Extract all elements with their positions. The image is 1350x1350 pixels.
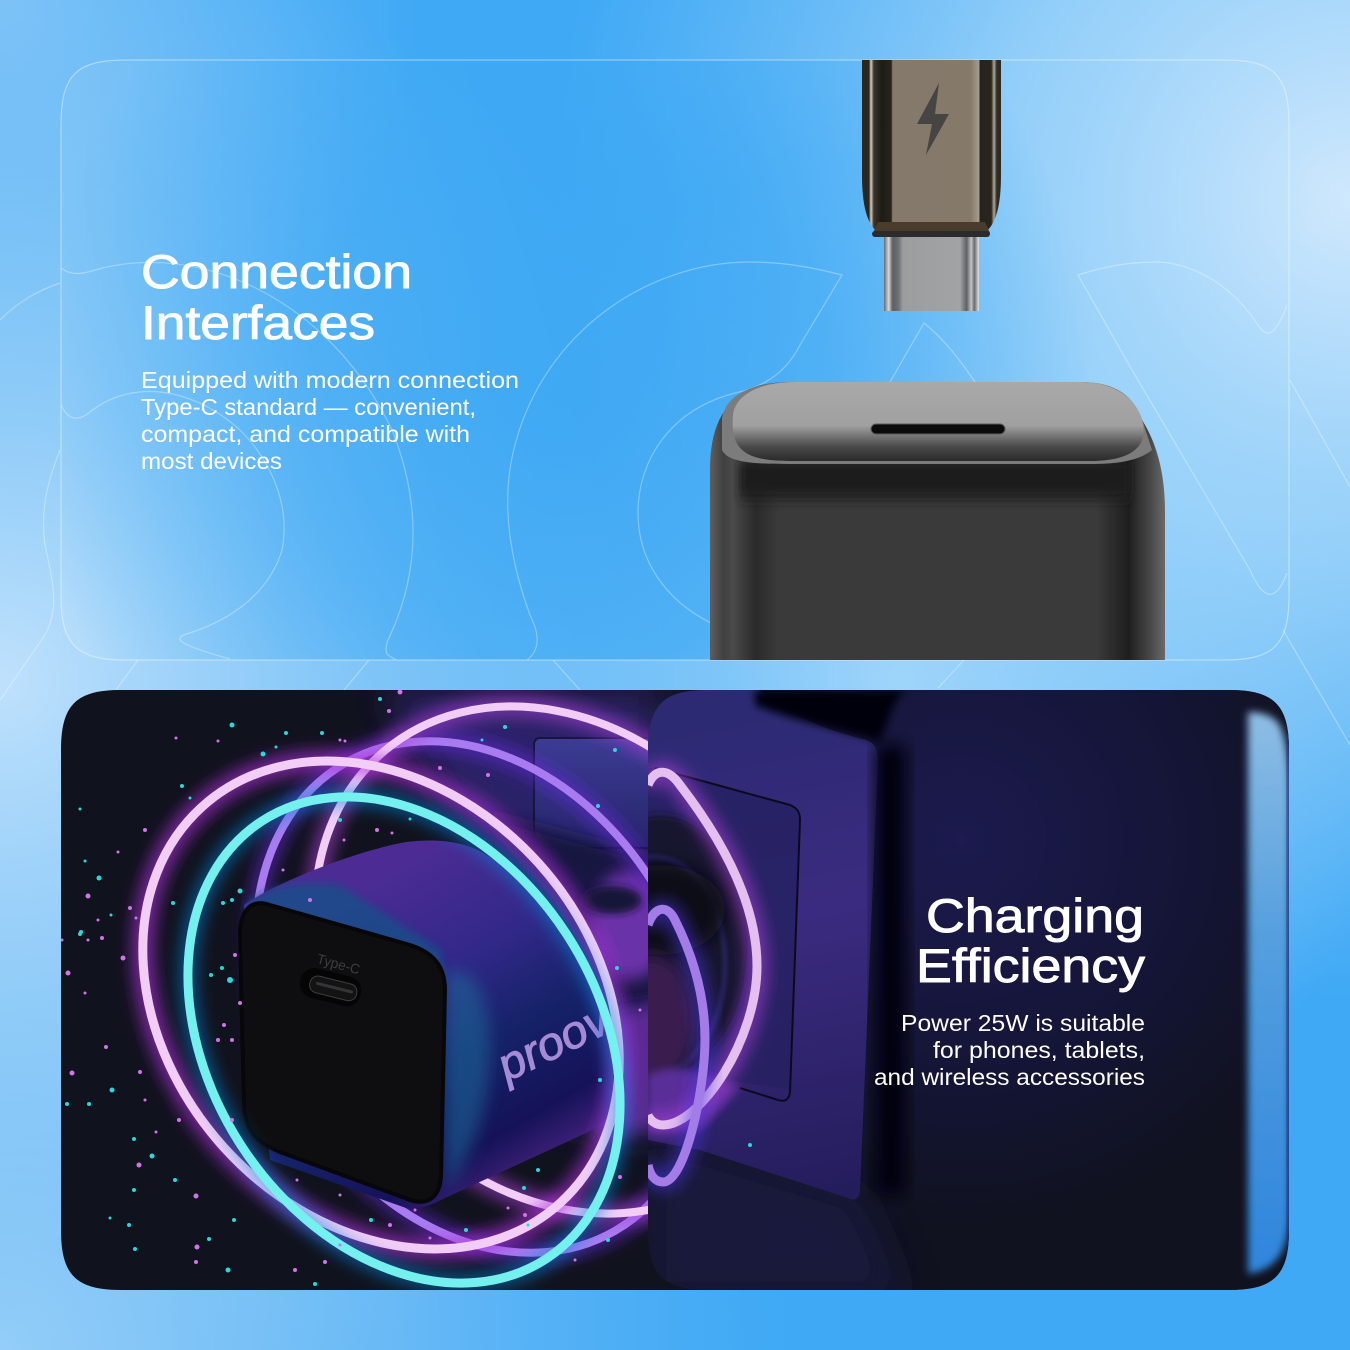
USB-C metal plug (884, 237, 979, 311)
charging description text: Power 25W is suitable (901, 1010, 1145, 1036)
charger front face (240, 903, 445, 1202)
socket plate outline (648, 768, 799, 1090)
heading: Connection Interfaces: Connection (141, 245, 412, 298)
charging description text: for phones, tablets, (933, 1037, 1145, 1063)
description text: Equipped with modern connection (141, 367, 519, 393)
glass panel surface (61, 60, 1289, 660)
purple back ring (235, 724, 648, 1272)
outer background logo outlines (0, 283, 1350, 745)
refracted pink ring (648, 772, 757, 1125)
pink back ring (296, 690, 650, 1232)
description text: compact, and compatible with (141, 421, 470, 447)
description text: Type-C standard — convenient, (141, 394, 476, 420)
blurred wall and socket (648, 690, 915, 1290)
heading: Charging Efficiency: Charging (926, 889, 1144, 942)
Type-C port (300, 968, 361, 1006)
Type-C label: Type-C (315, 950, 362, 977)
cyan sparkle particles (65, 697, 619, 1286)
pink front ring (120, 738, 638, 1270)
panel: charging efficiency glass (648, 690, 1289, 1290)
charging description text (874, 1010, 1145, 1090)
cyan front ring (168, 777, 637, 1290)
charging description text: and wireless accessories (874, 1064, 1145, 1090)
heading: Connection Interfaces (141, 245, 412, 349)
description text: most devices (141, 448, 282, 474)
heading: Charging Efficiency: Efficiency (916, 939, 1146, 992)
refracted logo outlines inside panel (61, 262, 1287, 660)
charger body (240, 840, 620, 1208)
charger USB-C port (871, 424, 1005, 434)
heading: Charging Efficiency (916, 889, 1146, 992)
proov logo: proov (487, 991, 620, 1092)
panel: charger with glowing rings (61, 690, 1289, 1290)
socket recess (648, 811, 751, 1070)
shadow right of wall plate (876, 745, 906, 1195)
blurred blue right edge (1248, 712, 1290, 1274)
pink sparkle particles (60, 690, 642, 1272)
glass haze (61, 60, 1289, 660)
icon: lightning bolt (917, 83, 949, 155)
black charger, top view (710, 382, 1165, 660)
description text (141, 367, 519, 474)
USB-C cable connector (862, 60, 1001, 311)
panel: connection interfaces (61, 60, 1289, 660)
refracted purple ring (648, 909, 705, 1182)
wall and socket behind charger (380, 690, 670, 1140)
heading: Connection Interfaces: Interfaces (141, 296, 375, 349)
